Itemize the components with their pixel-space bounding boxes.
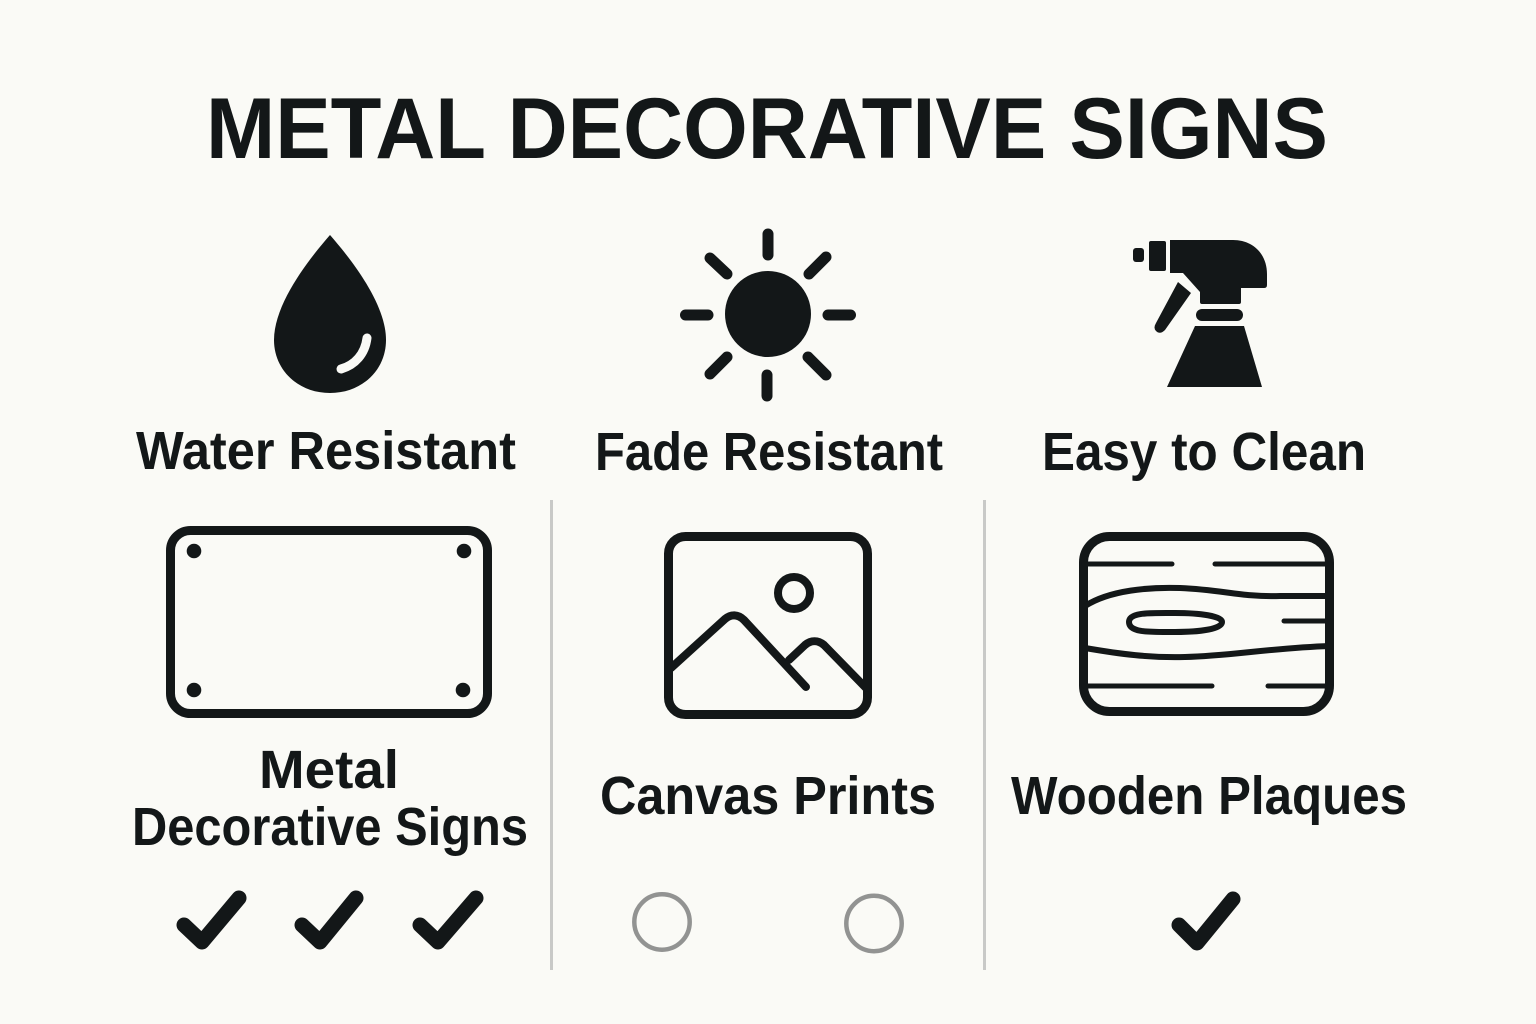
icon: canvas picture bbox=[668, 536, 868, 714]
label: wooden plaques: Wooden Plaques bbox=[1011, 766, 1407, 826]
icon: sun bbox=[686, 234, 850, 396]
metal signs check marks bbox=[184, 898, 476, 942]
column divider right bbox=[983, 500, 986, 970]
icon: metal sign plate bbox=[170, 530, 488, 714]
label: water resistant: Water Resistant bbox=[136, 421, 516, 481]
label: metal decorative signs: Decorative Signs bbox=[132, 797, 528, 857]
icon: wood plank bbox=[1084, 536, 1330, 712]
label: canvas prints: Canvas Prints bbox=[600, 766, 936, 826]
canvas prints empty circles bbox=[634, 894, 902, 951]
label: easy to clean: Easy to Clean bbox=[1042, 422, 1366, 482]
label: fade resistant: Fade Resistant bbox=[595, 422, 943, 482]
icon: water drop bbox=[274, 235, 386, 393]
column divider left bbox=[550, 500, 553, 970]
wooden plaques check mark bbox=[1179, 899, 1233, 943]
label: metal decorative signs bbox=[132, 740, 528, 857]
label: metal decorative signs: Metal bbox=[259, 740, 399, 800]
icon: spray bottle bbox=[1133, 240, 1267, 387]
title: METAL DECORATIVE SIGNS bbox=[206, 81, 1328, 177]
